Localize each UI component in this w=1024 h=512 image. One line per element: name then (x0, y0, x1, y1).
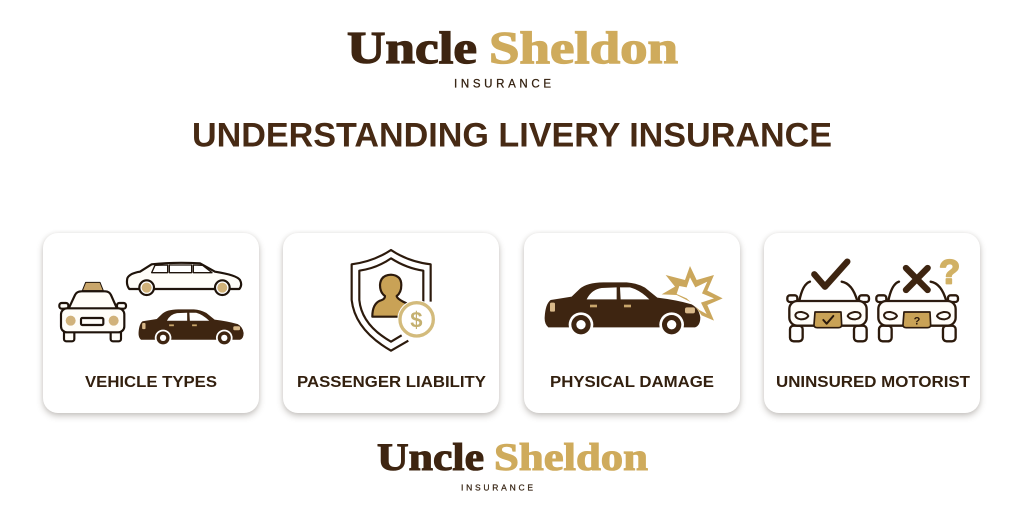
logo: bottom Uncle Sheldon Insurance: Sheldon (494, 436, 648, 479)
icon: damaged car with impact burst (545, 266, 723, 337)
icon: shield with person and dollar coin: $ (410, 307, 422, 332)
icon: insured car and uninsured car: ? (939, 254, 960, 292)
title: UNDERSTANDING LIVERY INSURANCE (192, 116, 832, 154)
logo: bottom Uncle Sheldon Insurance: INSURANCE (461, 482, 533, 492)
icon: insured car and uninsured car (787, 254, 960, 341)
logo: top Uncle Sheldon Insurance: Sheldon (489, 22, 678, 73)
label: uninsured motorist: UNINSURED MOTORIST (776, 374, 970, 391)
panel: physical damage (524, 233, 740, 413)
panel: vehicle types (43, 233, 259, 413)
label: physical damage: PHYSICAL DAMAGE (550, 374, 714, 391)
label: passenger liability: PASSENGER LIABILITY (297, 374, 486, 391)
icon: insured car and uninsured car: ? (914, 316, 921, 328)
icon: taxi, limousine and sedan (59, 263, 244, 346)
panel: uninsured motorist (764, 233, 980, 413)
icon: shield with person and dollar coin (352, 250, 436, 351)
logo: top Uncle Sheldon Insurance: Uncle (347, 22, 477, 73)
logo: bottom Uncle Sheldon Insurance: Uncle (377, 436, 484, 479)
logo: bottom Uncle Sheldon Insurance (377, 436, 648, 492)
logo: top Uncle Sheldon Insurance (347, 22, 678, 91)
label: vehicle types: VEHICLE TYPES (85, 374, 217, 391)
logo: top Uncle Sheldon Insurance: INSURANCE (454, 79, 551, 91)
panel: passenger liability (283, 233, 499, 413)
